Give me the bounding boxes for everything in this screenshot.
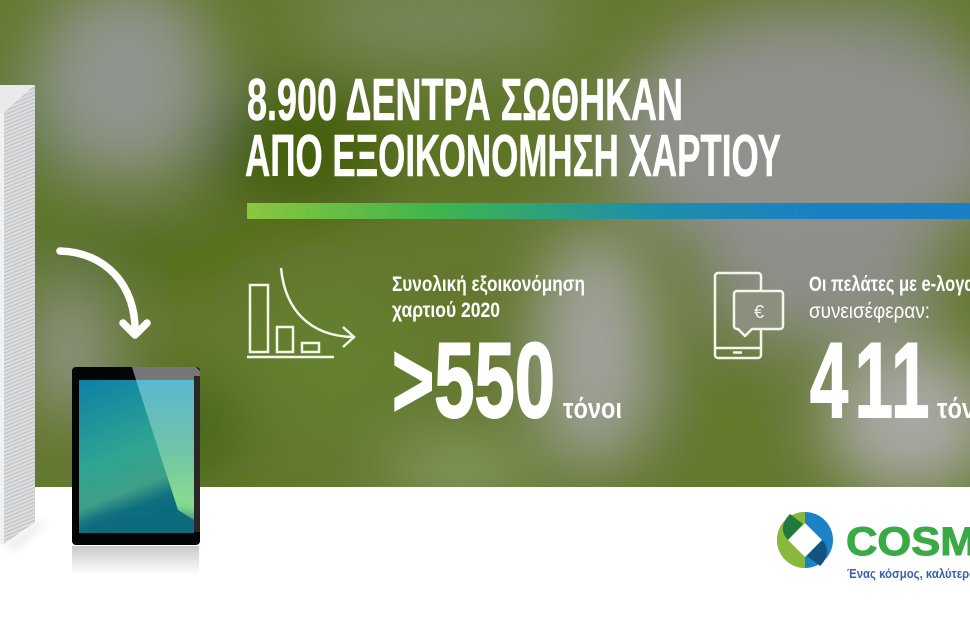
stat: total paper saving: [392, 273, 622, 440]
tablet body: [72, 367, 200, 545]
white lower strip: [0, 487, 970, 619]
tablet screen: [79, 380, 194, 533]
arrow from paper to tablet: [60, 251, 147, 335]
stat: e-bill customers: [809, 273, 970, 441]
tablet reflection: [72, 546, 199, 574]
stat: total paper saving: χαρτιού 2020: [392, 299, 500, 322]
icon: phone with euro bill bubble: €: [754, 302, 764, 322]
gradient rule: [247, 203, 970, 219]
logo mark: [777, 512, 833, 568]
stat: total paper saving: Συνολική εξοικονόμηση: [392, 273, 585, 296]
icon: phone with euro bill bubble: [715, 273, 783, 358]
logo: COSMOTE: [777, 512, 970, 581]
icon: chart with falling curve: [247, 268, 354, 357]
paper stack: [0, 85, 48, 552]
title: [245, 67, 781, 189]
tablet: [72, 367, 200, 570]
stat: e-bill customers: συνεισέφεραν:: [809, 300, 930, 323]
stat: total paper saving: >550: [392, 320, 555, 440]
stat: total paper saving: τόνοι: [563, 393, 622, 425]
stat: e-bill customers: 411: [810, 322, 929, 441]
title: 8.900 ΔΕΝΤΡΑ ΣΩΘΗΚΑΝ: [247, 67, 683, 133]
